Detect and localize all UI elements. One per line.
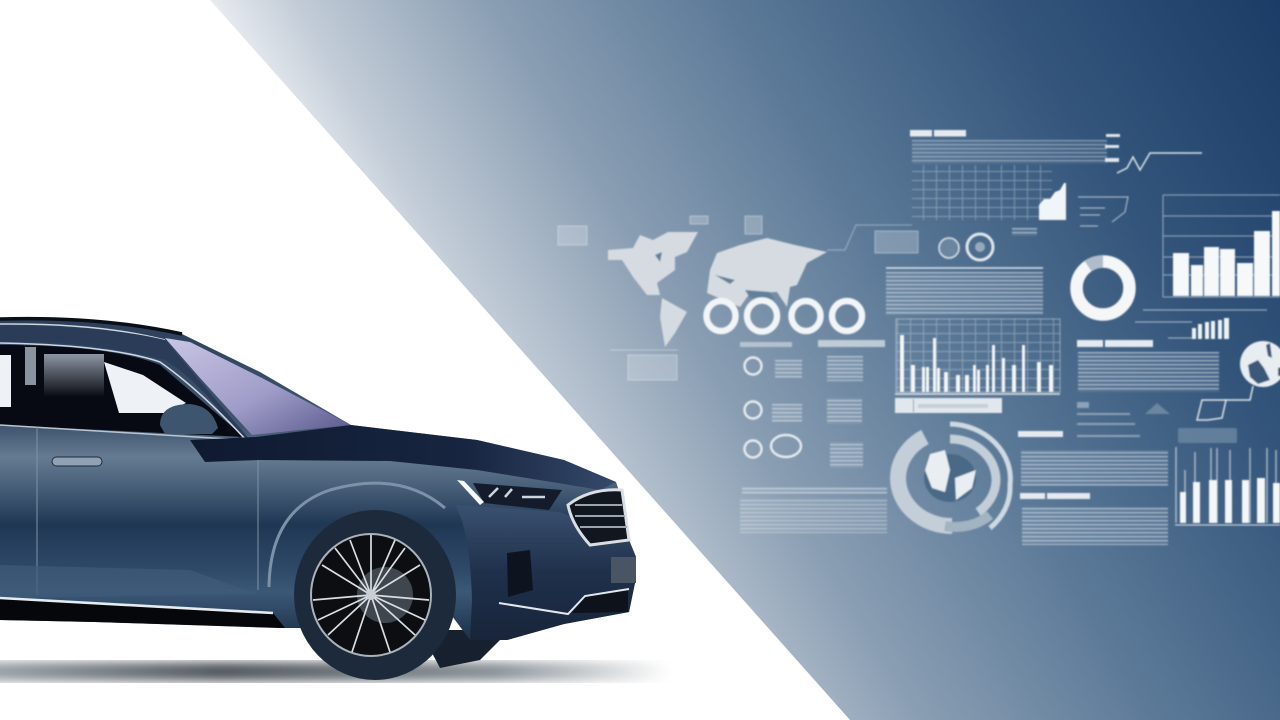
dark roof pillar — [0, 326, 250, 440]
hood — [190, 425, 616, 490]
small bars with caption lines — [1135, 310, 1267, 339]
bar chart: lower right — [1175, 447, 1280, 525]
front side glass — [104, 362, 186, 413]
seat headrest — [44, 354, 104, 396]
four progress rings — [706, 300, 862, 332]
left widget column — [740, 340, 887, 533]
sill chrome — [0, 598, 285, 628]
sparkline — [1117, 153, 1202, 173]
small marks beside sparkline — [1105, 134, 1120, 162]
dashboard overlay — [558, 130, 1280, 545]
lower grille — [499, 589, 629, 614]
mirror — [160, 404, 218, 434]
window frame highlight — [0, 343, 246, 440]
belt line — [0, 425, 245, 440]
middle right text rows — [1018, 400, 1237, 545]
bar chart: large top right — [1163, 195, 1280, 297]
text block above spike chart — [886, 268, 1043, 315]
short text rows — [740, 356, 887, 533]
icon: Eurasia and Africa — [707, 238, 827, 307]
donut chart — [1076, 261, 1130, 314]
panel: world map — [558, 216, 918, 380]
icon rings — [744, 358, 801, 458]
globe icon right — [1225, 341, 1280, 400]
door handle — [52, 457, 102, 466]
radial globe chart — [898, 424, 1010, 528]
panel: top table with grid — [910, 130, 1107, 220]
small dial icons — [939, 228, 1037, 260]
door seams — [37, 427, 258, 595]
roof highlight — [0, 324, 165, 340]
small line widget — [1078, 197, 1128, 226]
car shadow — [0, 662, 670, 681]
icon: North America — [608, 232, 698, 295]
headlight — [457, 480, 562, 510]
icon: South America — [660, 298, 687, 347]
roof line — [0, 319, 182, 334]
car body — [0, 319, 636, 640]
text block right of spike chart — [1077, 340, 1219, 392]
wheel spokes — [313, 535, 429, 652]
spike chart — [895, 319, 1060, 394]
rear glass strip — [0, 355, 11, 407]
map callout boxes — [558, 216, 918, 380]
air intake — [507, 550, 533, 597]
front fascia — [455, 505, 636, 640]
far-side front tyre — [420, 630, 510, 668]
small rising bars — [1039, 183, 1066, 220]
windshield — [165, 338, 351, 435]
B pillar — [25, 347, 36, 385]
side window area — [0, 345, 244, 437]
lower body panel — [0, 565, 260, 598]
grille — [568, 490, 629, 545]
fender arch — [269, 483, 445, 587]
inland dark patches — [655, 252, 775, 300]
car — [0, 319, 636, 680]
license plate — [611, 557, 636, 583]
label bar — [895, 398, 1002, 413]
front wheel — [294, 510, 456, 680]
